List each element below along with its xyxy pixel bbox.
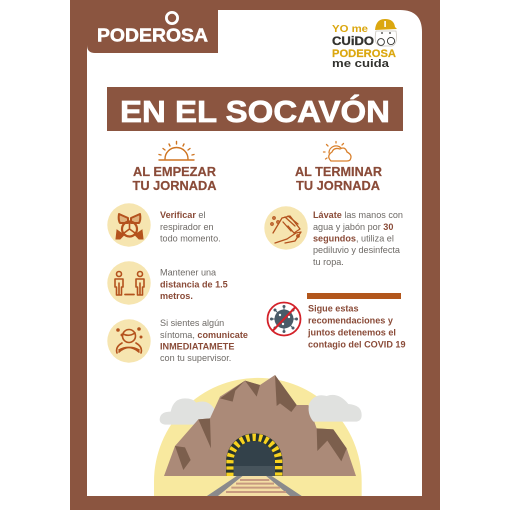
callout: sigue estas recomendaciones: juntos detenemos el [307,328,396,338]
callout: sigue estas recomendaciones: recomendaciones y [308,316,394,326]
heading: al terminar tu jornada: TU JORNADA [296,178,381,193]
mountain [164,375,356,476]
text: lavate las manos: tu ropa. [313,257,344,267]
text: comunicate con supervisor: Si sientes algún [160,318,224,328]
text: comunicate con supervisor [160,318,248,363]
cloud: right [309,395,362,422]
text: comunicate con supervisor: síntoma, comunicate [160,330,248,340]
logo: Poderosa [97,12,208,45]
logo: Yo me cuido, Poderosa me cuida: YO me [332,23,368,35]
heading: al terminar tu jornada [295,164,383,193]
text: lavate las manos: Lávate las manos con [313,210,403,220]
callout: sigue estas recomendaciones: contagio del COVID 19 [308,340,406,350]
title banner: EN EL SOCAVÓN [120,93,390,129]
text: verificar el respirador: respirador en [160,222,214,232]
text: lavate las manos: segundos, utiliza el [313,234,394,244]
text: verificar el respirador: todo momento. [160,234,221,244]
text: verificar el respirador [160,210,221,244]
logo: Yo me cuido, Poderosa me cuida: CUiDO [332,36,374,48]
text: lavate las manos: pediluvio y desinfecta [313,245,401,255]
logo: Poderosa: PODEROSA [97,26,208,46]
logo: Yo me cuido, Poderosa me cuida [332,19,397,70]
icon: distance between people [107,261,151,305]
heading: al empezar tu jornada [132,164,217,193]
text: comunicate con supervisor: con tu supervisor. [160,353,231,363]
text: comunicate con supervisor: INMEDIATAMETE [160,342,234,352]
logo: Yo me cuido, Poderosa me cuida: PODEROSA [332,48,396,60]
panel: brown frame [70,0,440,510]
icon: sunrise [159,142,194,160]
divider bar [307,293,401,299]
rails [206,476,303,497]
text: lavate las manos [313,210,403,267]
icon: washing hands [264,206,308,250]
icon: person with symptoms [107,319,151,363]
text: lavate las manos: agua y jabón por 30 [313,222,393,232]
logo: Yo me cuido, Poderosa me cuida: me cuida [332,58,390,70]
text: mantener distancia [160,268,228,301]
callout: sigue estas recomendaciones [307,304,406,350]
icon: mascot with helmet [375,19,397,46]
bottom bar [70,496,440,510]
mountain shadows [175,375,347,470]
heading: al terminar tu jornada: AL TERMINAR [295,164,383,179]
sun backdrop [154,378,362,496]
icon: no covid [268,302,300,336]
callout: sigue estas recomendaciones: Sigue estas [308,304,359,314]
icon: sun and cloud [324,142,351,161]
heading: al empezar tu jornada: TU JORNADA [132,178,217,193]
text: verificar el respirador: Verificar el [160,210,206,220]
illustration: mountain tunnel [154,375,362,497]
text: mantener distancia: metros. [160,291,193,301]
text: mantener distancia: Mantener una [160,268,217,278]
text: mantener distancia: distancia de 1.5 [160,280,228,290]
cloud: left [160,398,215,425]
title banner [107,87,403,131]
icon: respirator [107,203,151,247]
tunnel [226,433,283,476]
heading: al empezar tu jornada: AL EMPEZAR [133,164,217,179]
